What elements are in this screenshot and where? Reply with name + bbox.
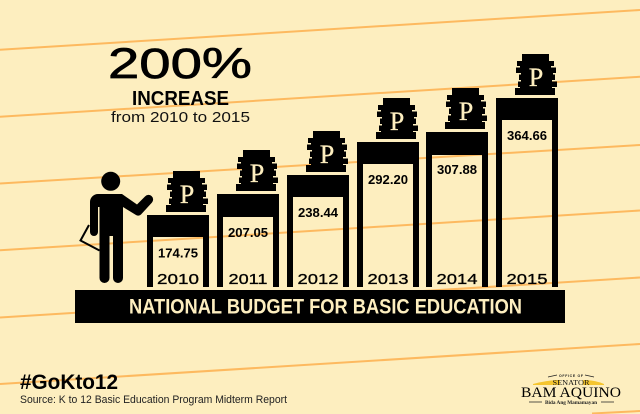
base banner: national budget bbox=[75, 290, 565, 323]
value: 364.66 bbox=[507, 128, 547, 143]
logo: office of senator Bam Aquino bbox=[521, 374, 621, 406]
bar 2015 bbox=[496, 54, 558, 288]
icon: peso coin stack: P bbox=[250, 159, 264, 188]
value: 174.75 bbox=[158, 246, 198, 260]
value: 292.20 bbox=[368, 172, 408, 187]
logo: office of senator Bam Aquino: SENATOR bbox=[552, 378, 590, 387]
source line: Source: K to 12 Basic Education Program Midterm Report bbox=[20, 394, 287, 406]
base banner: national budget: NATIONAL BUDGET FOR BASIC EDUCATION bbox=[129, 296, 522, 318]
icon: peso coin stack bbox=[515, 54, 557, 95]
year: 2011 bbox=[228, 271, 268, 288]
value: 307.88 bbox=[437, 162, 477, 177]
bar 2012 bbox=[287, 131, 349, 288]
bar 2010 bbox=[147, 171, 209, 288]
logo: office of senator Bam Aquino: Bida Ang Mamamayan bbox=[545, 400, 597, 406]
icon: peso coin stack bbox=[376, 98, 418, 139]
icon: peso coin stack bbox=[445, 88, 487, 129]
year: 2010 bbox=[157, 271, 199, 288]
headline: 200% increase bbox=[108, 40, 252, 126]
icon: peso coin stack: P bbox=[529, 63, 543, 92]
logo: office of senator Bam Aquino: BAM AQUINO bbox=[521, 385, 621, 401]
big percentage: 200% bbox=[108, 40, 252, 88]
increase label: INCREASE bbox=[132, 87, 229, 110]
year: 2012 bbox=[298, 271, 338, 288]
icon: peso coin stack bbox=[306, 131, 348, 172]
value: 238.44 bbox=[298, 205, 339, 220]
icon: peso coin stack: P bbox=[320, 140, 334, 169]
bar 2013 bbox=[357, 98, 419, 288]
bar 2014 bbox=[426, 88, 488, 288]
icon: peso coin stack: P bbox=[180, 180, 194, 209]
period subtitle: from 2010 to 2015 bbox=[111, 109, 250, 126]
year: 2014 bbox=[436, 271, 478, 288]
year: 2013 bbox=[368, 271, 408, 288]
logo: office of senator Bam Aquino: OFFICE OF bbox=[559, 374, 584, 378]
icon: peso coin stack: P bbox=[390, 107, 404, 136]
hashtag: #GoKto12 bbox=[20, 371, 118, 394]
bar 2011 bbox=[217, 150, 279, 288]
icon: peso coin stack: P bbox=[459, 97, 473, 126]
value: 207.05 bbox=[228, 225, 268, 240]
icon: person pointing with folder bbox=[80, 172, 153, 283]
year: 2015 bbox=[506, 271, 548, 288]
